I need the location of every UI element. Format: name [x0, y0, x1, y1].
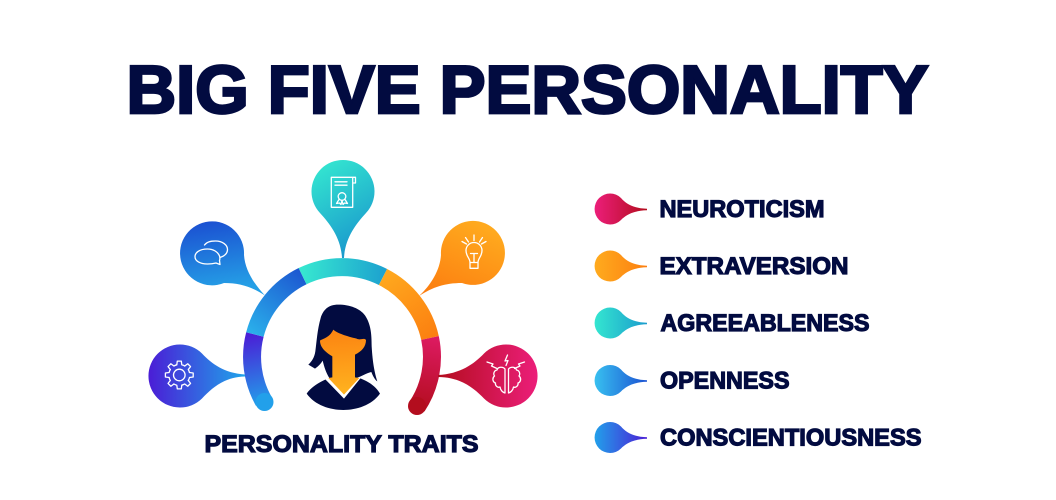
- legend item: extraversion: [595, 250, 848, 281]
- legend item: extraversion: EXTRAVERSION: [660, 253, 848, 280]
- title: BIG FIVE PERSONALITY: [126, 52, 928, 128]
- arc end cap right: [408, 397, 426, 415]
- arc segment: neuroticism: [417, 338, 432, 406]
- icon: person: [307, 305, 380, 410]
- body: [307, 378, 380, 410]
- legend item: neuroticism: NEUROTICISM: [660, 196, 824, 223]
- arc end cap left: [256, 393, 274, 411]
- pin: extraversion light bulb: [419, 221, 505, 296]
- arc segment: extraversion: [383, 277, 430, 338]
- legend item: agreeableness: AGREEABLENESS: [660, 310, 870, 337]
- pin: conscientiousness gear: [148, 344, 245, 408]
- legend item: openness: [595, 365, 790, 396]
- face: [320, 330, 366, 395]
- legend item: openness: OPENNESS: [660, 368, 790, 395]
- legend item: conscientiousness: CONSCIENTIOUSNESS: [660, 425, 922, 452]
- icon: brain: [487, 355, 524, 393]
- arc segment: conscientiousness: [252, 334, 264, 401]
- pin: neuroticism brain: [438, 344, 538, 408]
- legend: [595, 194, 922, 453]
- legend item: conscientiousness: [595, 422, 922, 453]
- arc segment: agreeableness: [303, 267, 383, 277]
- legend item: neuroticism: [595, 194, 824, 224]
- fringe: [341, 330, 355, 338]
- icon: certificate: [331, 177, 356, 207]
- hair: [308, 305, 377, 381]
- pin: agreeableness certificate: [312, 160, 374, 258]
- icon: gear: [165, 361, 193, 389]
- pin: openness speech bubbles: [180, 221, 265, 296]
- diagram: personality arc with pins: [148, 160, 538, 415]
- icon: speech bubbles: [195, 241, 228, 264]
- icon: light bulb: [462, 235, 486, 268]
- legend item: agreeableness: [595, 308, 870, 338]
- diagram caption: PERSONALITY TRAITS: [204, 431, 478, 458]
- collar: [325, 377, 361, 399]
- arc segment: openness: [255, 276, 303, 334]
